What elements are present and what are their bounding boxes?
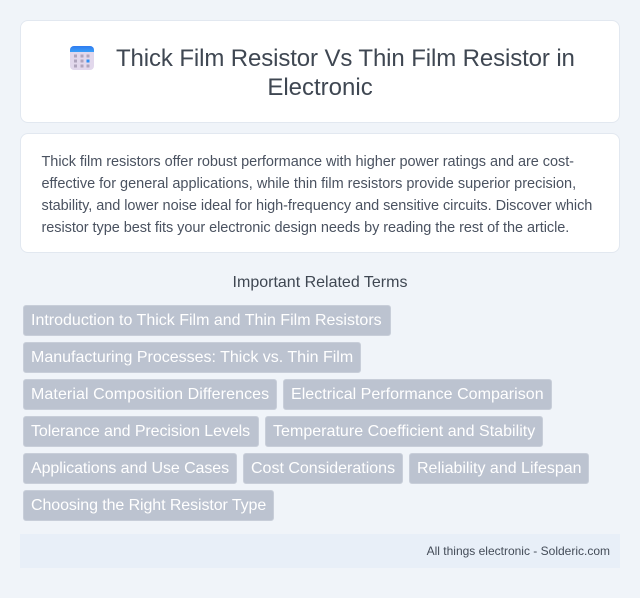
icon: calendar: [70, 46, 94, 70]
summary text: resistor type best fits your electronic design needs by reading the rest of the article.: [42, 220, 569, 236]
chip: Introduction to Thick Film and Thin Film Resistors: [31, 312, 382, 329]
chip: [23, 305, 391, 336]
related terms heading: Important Related Terms: [233, 274, 407, 291]
chip: [243, 453, 403, 484]
title: [116, 45, 575, 101]
chip: Electrical Performance Comparison: [291, 386, 544, 403]
chip: [23, 342, 361, 373]
chip: Manufacturing Processes: Thick vs. Thin Film: [31, 349, 353, 366]
summary text: stability, and lower noise ideal for high-frequency and sensitive circuits. Discover which: [42, 198, 592, 214]
summary text: effective for general applications, while thin film resistors provide superior precision,: [42, 176, 576, 192]
summary text: Thick film resistors offer robust performance with higher power ratings and are cost-: [42, 154, 574, 170]
chip: Cost Considerations: [251, 460, 395, 477]
footer credit: All things electronic - Solderic.com: [427, 544, 610, 558]
chip: Applications and Use Cases: [31, 460, 229, 477]
chip: [23, 379, 277, 410]
chip: [23, 490, 274, 521]
title: Electronic: [267, 74, 373, 101]
chip: Tolerance and Precision Levels: [31, 423, 250, 440]
footer bar: [20, 534, 620, 568]
header panel: [20, 20, 620, 123]
chip: Reliability and Lifespan: [417, 460, 582, 477]
chip: Choosing the Right Resistor Type: [31, 497, 266, 514]
chip: [23, 416, 259, 447]
chip: [23, 453, 237, 484]
title: Thick Film Resistor Vs Thin Film Resistor in: [116, 45, 575, 72]
chip: Material Composition Differences: [31, 386, 269, 403]
chip: [409, 453, 589, 484]
summary panel: [20, 133, 620, 253]
chip: [265, 416, 543, 447]
related terms chips: [23, 305, 589, 521]
chip: Temperature Coefficient and Stability: [273, 423, 535, 440]
chip: [283, 379, 552, 410]
summary text: [42, 154, 592, 236]
